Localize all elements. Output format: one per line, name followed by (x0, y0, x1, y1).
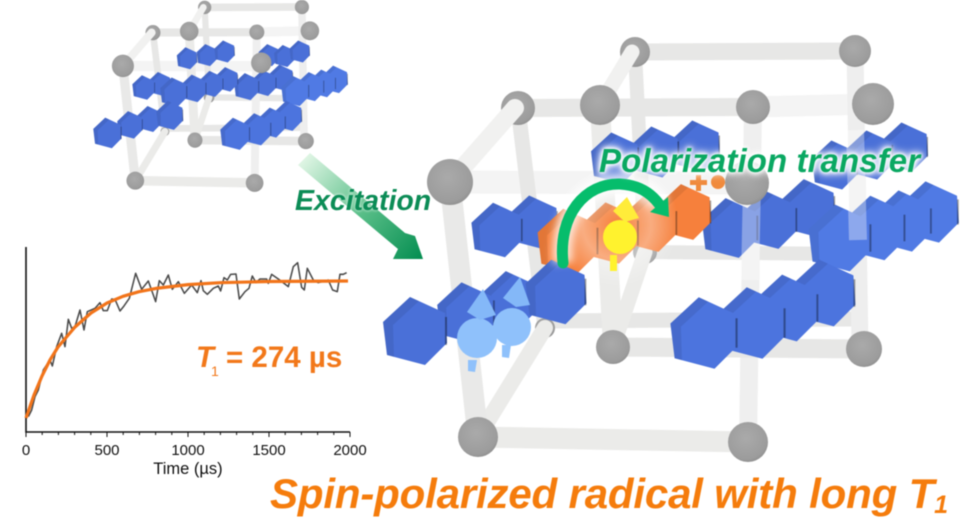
front right blue hexagon row (670, 260, 855, 369)
axis tick labels: 1500 (252, 442, 286, 459)
T1 value label: = 274 µs (226, 341, 342, 374)
orange radical hexagons (538, 184, 711, 273)
axis tick labels: 2000 (333, 442, 367, 459)
noisy data trace (28, 263, 347, 417)
axis title: Time (µs) (153, 460, 223, 478)
pale glow over radical (555, 163, 679, 287)
axis tick labels (22, 442, 367, 459)
polarization transfer label: Polarization transfer (599, 142, 920, 179)
node in front of hexagons (725, 161, 769, 205)
excitation label: Excitation (295, 185, 431, 217)
title: 1 (934, 491, 948, 519)
icon: blue spin up right (493, 277, 531, 358)
T1 value label: T (196, 341, 217, 374)
back blue hexagon rows (591, 120, 928, 189)
front left blue hexagon row (383, 260, 586, 365)
T1 value label: 1 (211, 363, 219, 379)
glow beneath transfer arrow (562, 184, 660, 263)
blue hexagons left of radical (471, 195, 558, 257)
node top right (852, 83, 894, 125)
small lattice with blue hexagon rows (93, 0, 348, 192)
middle blue hexagon row (702, 179, 835, 258)
decay chart (22, 247, 367, 478)
node top centre (580, 85, 620, 125)
axis tick labels: 1000 (171, 442, 205, 459)
icon: radical plus sign and dot (690, 175, 725, 191)
icon: yellow spin (603, 197, 639, 271)
node front top left (427, 159, 473, 205)
axis tick labels: 0 (22, 442, 30, 459)
axis tick labels: 500 (94, 442, 120, 459)
large lattice framework (450, 35, 882, 462)
arrow: excitation (298, 153, 423, 259)
right blue hexagon row (809, 181, 959, 271)
chart axes and ticks (26, 247, 350, 437)
icon: blue spin up left (457, 289, 497, 372)
orange exponential fit (26, 281, 348, 418)
arrow: polarization transfer (562, 184, 669, 263)
title: Spin-polarized radical with long T (270, 470, 934, 517)
translucent rods over hexagons (750, 130, 858, 280)
